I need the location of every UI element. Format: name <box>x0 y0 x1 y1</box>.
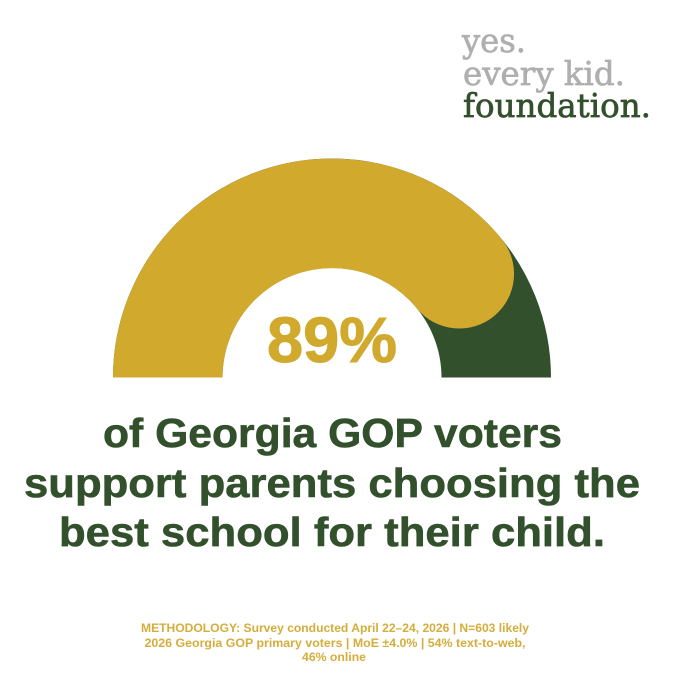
gauge track <box>168 213 496 378</box>
gauge value arc <box>168 213 459 378</box>
methodology note: 46% online <box>302 650 366 664</box>
big percentage: 89% <box>267 304 397 376</box>
headline: best school for their child. <box>59 509 605 555</box>
gauge value rounded cap <box>405 219 514 329</box>
logo: yes. every kid. foundation.: yes. <box>461 21 526 60</box>
methodology note <box>141 621 529 664</box>
headline: support parents choosing the <box>24 460 640 506</box>
headline: of Georgia GOP voters <box>103 410 562 456</box>
methodology note: METHODOLOGY: Survey conducted April 22–24, 2026 | N=603 likely <box>141 621 529 635</box>
logo: yes. every kid. foundation.: every kid. <box>463 54 625 93</box>
gauge chart: 89% <box>168 213 514 378</box>
logo: yes. every kid. foundation.: foundation. <box>463 86 651 125</box>
headline <box>24 410 640 555</box>
methodology note: 2026 Georgia GOP primary voters | MoE ±4.0% | 54% text-to-web, <box>144 636 526 650</box>
logo: yes. every kid. foundation. <box>461 21 651 125</box>
